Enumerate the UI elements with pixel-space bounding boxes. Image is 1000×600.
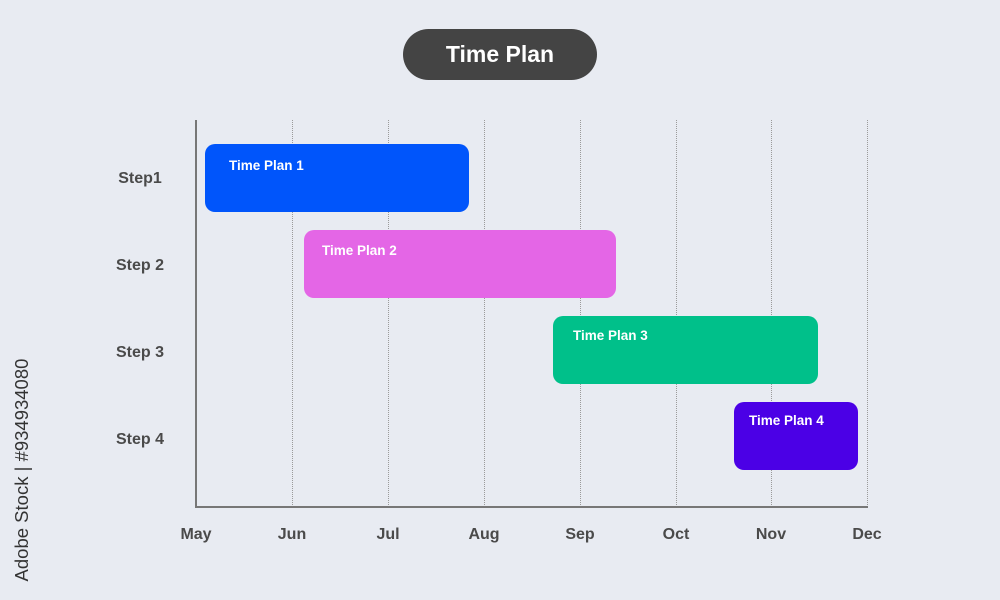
month labels: Oct: [663, 526, 689, 543]
step labels: [116, 170, 164, 448]
month labels: Jun: [278, 526, 306, 543]
month labels: Dec: [852, 526, 882, 543]
bar: time plan 4: [734, 402, 858, 470]
bar: time plan 1: [205, 144, 469, 212]
step labels: Step 4: [116, 431, 164, 448]
month labels: Aug: [468, 526, 500, 543]
title: Time Plan: [446, 41, 554, 67]
step labels: Step 3: [116, 344, 164, 361]
month labels: [180, 526, 882, 543]
y axis: [195, 120, 197, 508]
month labels: Jul: [376, 526, 400, 543]
step labels: Step1: [118, 170, 162, 187]
bar: time plan 3: [553, 316, 818, 384]
bar: time plan 2: [304, 230, 616, 298]
month labels: Sep: [565, 526, 595, 543]
month labels: Nov: [756, 526, 786, 543]
bar: time plan 4: Time Plan 4: [749, 413, 824, 428]
bar: time plan 2: Time Plan 2: [322, 243, 397, 258]
step labels: Step 2: [116, 257, 164, 274]
bar: time plan 1: Time Plan 1: [229, 158, 304, 173]
title: [403, 29, 597, 80]
month labels: May: [180, 526, 212, 543]
bar: time plan 3: Time Plan 3: [573, 328, 648, 343]
watermark caption: Adobe Stock | #934934080: [11, 359, 32, 581]
x axis: [195, 506, 868, 508]
